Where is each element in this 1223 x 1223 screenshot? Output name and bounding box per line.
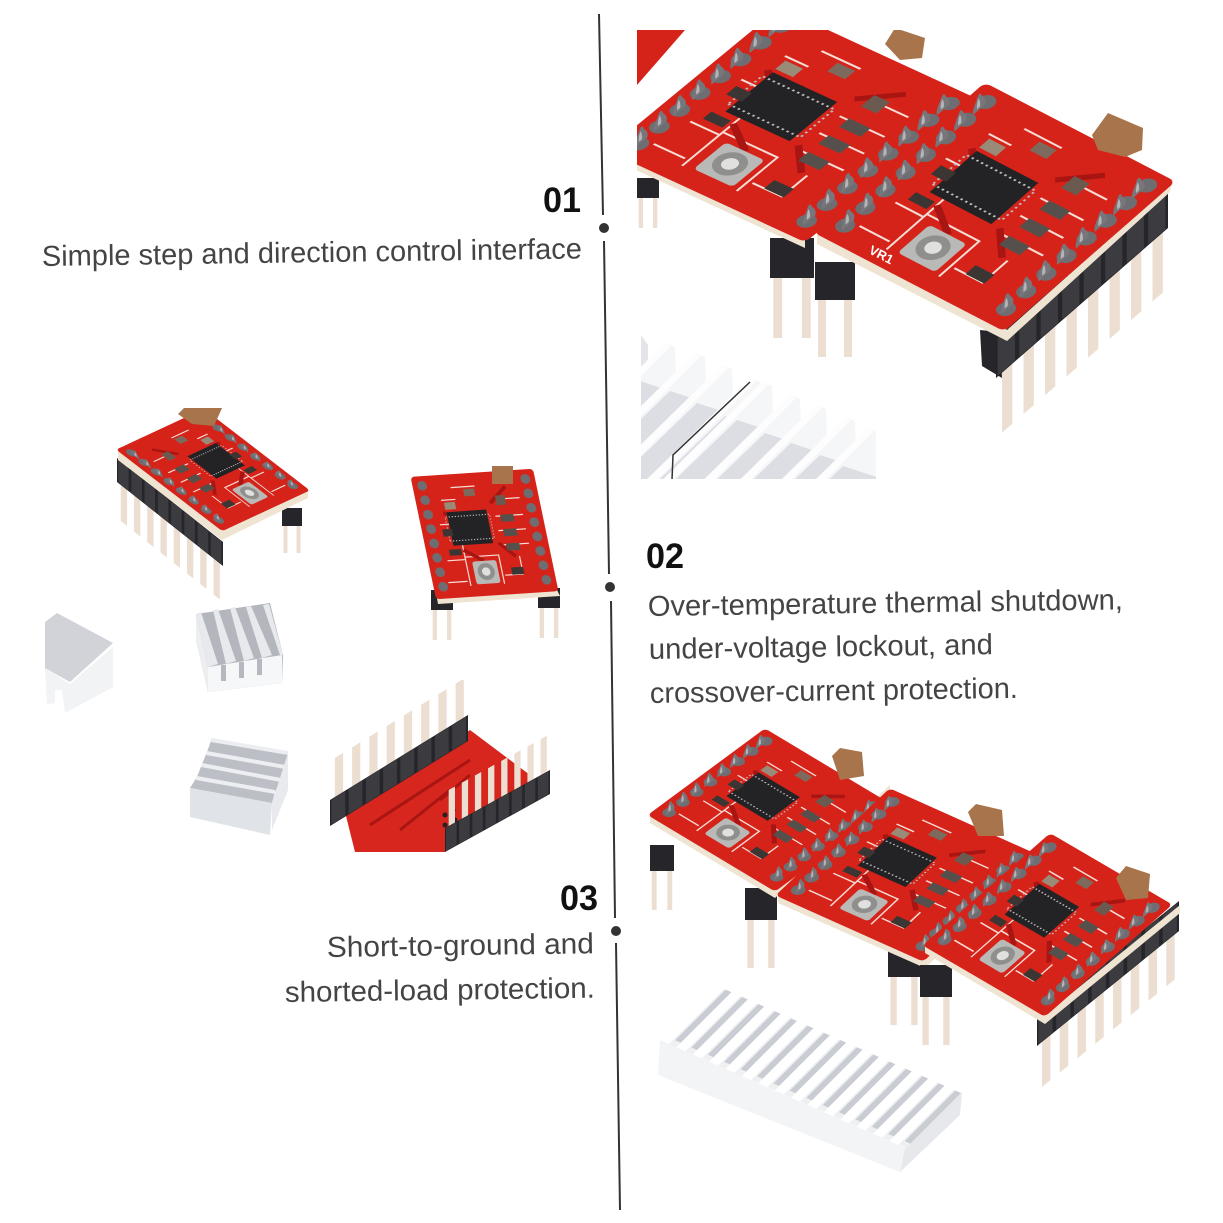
- feature 01 heading and text: 01: [543, 181, 581, 220]
- feature 02 heading and text: under-voltage lockout, and: [649, 629, 993, 666]
- feature 02 heading and text: crossover-current protection.: [650, 673, 1018, 710]
- photo: two driver boards close-up: [637, 30, 1172, 432]
- feature 02 heading and text: Over-temperature thermal shutdown,: [648, 584, 1123, 623]
- photo: three heat sinks: [658, 985, 962, 1172]
- feature 03 heading and text: [285, 879, 598, 1009]
- photo: heat sinks close-up: [641, 335, 876, 479]
- feature 03 heading and text: shorted-load protection.: [285, 973, 595, 1009]
- feature 03 heading and text: 03: [560, 879, 598, 918]
- feature 01 heading and text: Simple step and direction control interface: [42, 233, 582, 273]
- feature 03 heading and text: Short-to-ground and: [327, 928, 594, 964]
- photo: small driver board, angled: [116, 408, 310, 602]
- timeline dots: [599, 223, 621, 936]
- vertical timeline line: [599, 14, 620, 1210]
- photo: three driver boards: [648, 728, 1180, 1091]
- feature 02 heading and text: [646, 537, 1123, 710]
- photo: silver block heat sink: [45, 613, 113, 713]
- feature 01 heading and text: [42, 181, 582, 273]
- photo: finned heat sink flat: [190, 738, 288, 835]
- photo: two driver boards close-up: VR1: [867, 242, 896, 267]
- photo: driver board underside: [330, 676, 550, 852]
- photo: finned heat sink upright: [196, 603, 283, 692]
- feature 02 heading and text: 02: [646, 537, 684, 576]
- photo: small driver board, frontal: [411, 466, 560, 640]
